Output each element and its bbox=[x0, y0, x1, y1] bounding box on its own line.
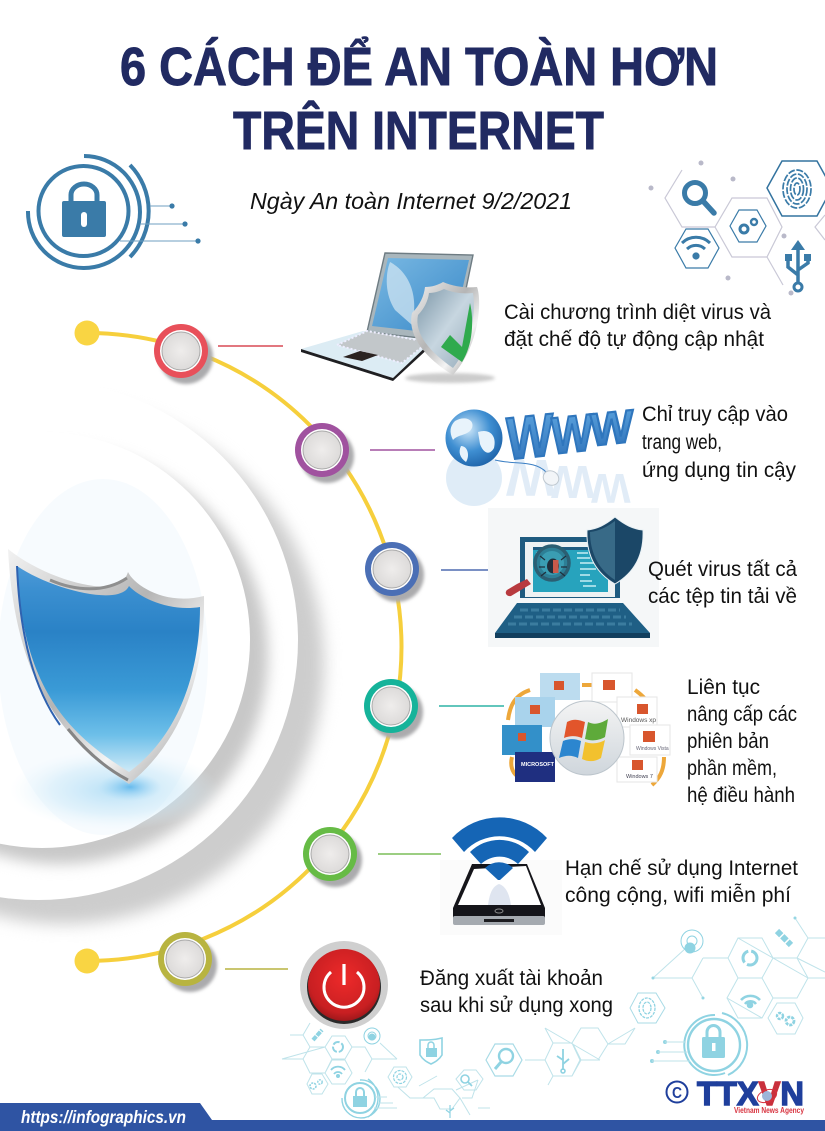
step texts: Cài chương trình diệt virus và bbox=[504, 301, 771, 324]
step texts: Quét virus tất cả bbox=[648, 558, 797, 581]
footer bar with website: https://infographics.vn bbox=[21, 1107, 186, 1127]
title: 6 CÁCH ĐỂ AN TOÀN HƠN bbox=[120, 37, 718, 97]
step texts: Hạn chế sử dụng Internet bbox=[565, 857, 798, 880]
step texts: Chỉ truy cập vào bbox=[642, 403, 788, 426]
pale small icons bbox=[310, 930, 794, 1118]
illustration: Windows versions cycle: Windows 7 bbox=[626, 774, 653, 780]
icon: red power button bbox=[300, 941, 388, 1029]
illustration: smartphone with wifi bbox=[440, 817, 562, 935]
step 6: log out bbox=[158, 932, 388, 1029]
step 1: antivirus bbox=[154, 253, 495, 384]
illustration: laptop with shield bbox=[301, 253, 495, 383]
step texts: hệ điều hành bbox=[687, 784, 795, 807]
step 4: update software bbox=[364, 673, 670, 785]
step texts: sau khi sử dụng xong bbox=[420, 994, 613, 1017]
step texts: ứng dụng tin cậy bbox=[642, 459, 796, 482]
step texts: Liên tục bbox=[687, 676, 760, 699]
illustration: laptop virus scan bbox=[488, 508, 659, 647]
step 2: trusted websites bbox=[295, 393, 633, 512]
background decoration: concentric white discs with shadows bbox=[0, 380, 324, 924]
step texts: nâng cấp các bbox=[687, 703, 797, 726]
timeline curve bbox=[74, 320, 402, 974]
step texts bbox=[420, 301, 798, 1017]
step texts: trang web, bbox=[642, 431, 722, 454]
step texts: phiên bản bbox=[687, 730, 769, 753]
illustration: globe and WWW: W bbox=[590, 400, 633, 456]
illustration: Windows versions cycle bbox=[502, 673, 670, 785]
step texts: đặt chế độ tự động cập nhật bbox=[504, 328, 764, 351]
step texts: phần mềm, bbox=[687, 757, 777, 780]
illustration: globe and WWW bbox=[446, 393, 633, 512]
step texts: Đăng xuất tài khoản bbox=[420, 967, 603, 990]
step 5: public wifi bbox=[303, 817, 562, 935]
illustration: globe and WWW: W bbox=[591, 465, 631, 512]
logo: TTXVN copyright: C bbox=[672, 1085, 682, 1102]
illustration: Windows versions cycle: Windows xp bbox=[621, 717, 656, 724]
illustration: Windows versions cycle: MICROSOFT bbox=[521, 762, 555, 768]
icon: small pale lock bbox=[342, 1079, 397, 1118]
icon: pale shield lock bbox=[420, 1038, 442, 1064]
step texts: các tệp tin tải về bbox=[648, 585, 797, 608]
illustration: Windows versions cycle: Windows Vista bbox=[636, 746, 669, 752]
icon: padlock with rings bbox=[28, 156, 201, 268]
step texts: công cộng, wifi miễn phí bbox=[565, 884, 791, 907]
icon cluster: search, fingerprint, settings, wifi, usb bbox=[648, 160, 825, 296]
subtitle: Ngày An toàn Internet 9/2/2021 bbox=[250, 188, 572, 214]
title bbox=[120, 37, 718, 161]
illustration: globe and WWW: W bbox=[551, 404, 594, 466]
step 3: scan downloads bbox=[365, 508, 659, 647]
illustration: globe and WWW: W bbox=[506, 401, 553, 473]
illustration: globe and WWW: W bbox=[551, 456, 595, 508]
decorative network: light blue tech icons bbox=[282, 916, 825, 1118]
logo: TTXVN copyright: Vietnam News Agency bbox=[734, 1106, 805, 1115]
icon: big pale lock bbox=[652, 1013, 747, 1075]
illustration: globe and WWW: W bbox=[506, 448, 556, 506]
footer bar with website bbox=[0, 1103, 825, 1131]
large blue shield bbox=[8, 549, 204, 784]
title: TRÊN INTERNET bbox=[233, 100, 604, 161]
logo: TTXVN copyright: TTXVN bbox=[697, 1075, 804, 1112]
